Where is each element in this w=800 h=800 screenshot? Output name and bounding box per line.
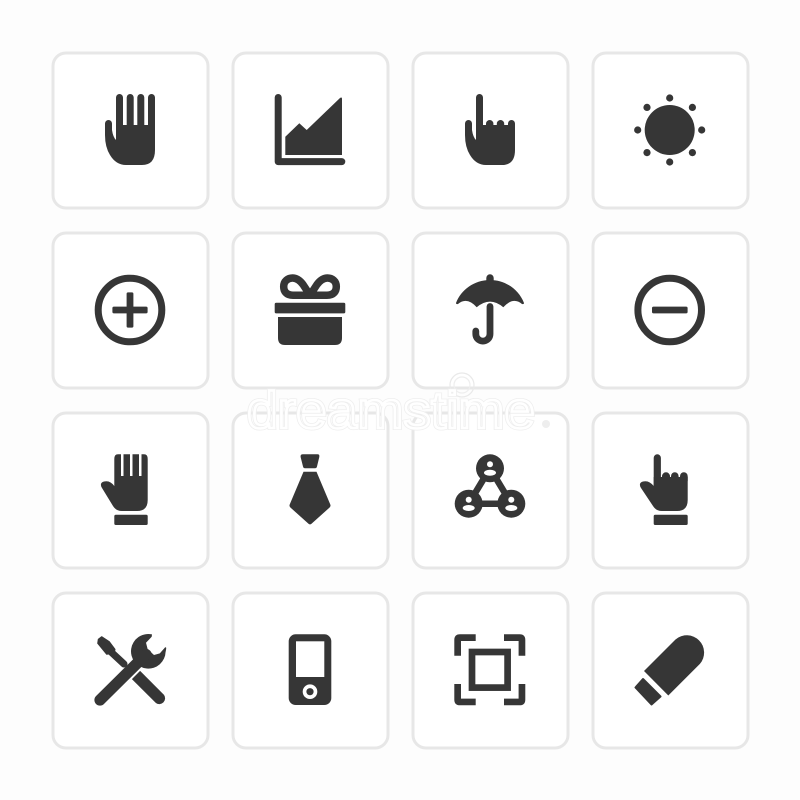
icon: pointing hand [465, 94, 515, 165]
icon: gloved hand [101, 453, 148, 525]
panel: minus [593, 233, 748, 388]
icon: area chart [278, 97, 342, 162]
panel: focus frame [413, 593, 568, 748]
watermark: dreamstime [247, 382, 535, 440]
icon: plus in circle [98, 278, 162, 342]
panel: gift [233, 233, 388, 388]
panel: usb stick [593, 593, 748, 748]
icon: usb stick [636, 635, 704, 704]
panel: media player [233, 593, 388, 748]
panel: network [413, 413, 568, 568]
icon: focus frame [454, 634, 525, 705]
icon: minus in circle [638, 278, 702, 342]
panel: tie [233, 413, 388, 568]
icon: umbrella [456, 274, 524, 341]
panel: pointing hand [413, 53, 568, 208]
icon: media player [289, 634, 331, 705]
icon: wrench and screwdriver [98, 634, 166, 704]
panel: tools [53, 593, 208, 748]
panel: umbrella [413, 233, 568, 388]
panel: area chart [233, 53, 388, 208]
icon: gift box [275, 278, 345, 345]
panel: pointing glove [593, 413, 748, 568]
watermark: dreamstime [247, 382, 535, 440]
panel: plus [53, 233, 208, 388]
icon: people network [455, 454, 525, 518]
icon: open hand [105, 94, 155, 165]
panel: open hand [53, 53, 208, 208]
panel: sun [593, 53, 748, 208]
icon: pointing gloved hand [640, 454, 688, 525]
icon: sun [634, 94, 705, 166]
icon: necktie [289, 454, 331, 524]
panel: glove [53, 413, 208, 568]
